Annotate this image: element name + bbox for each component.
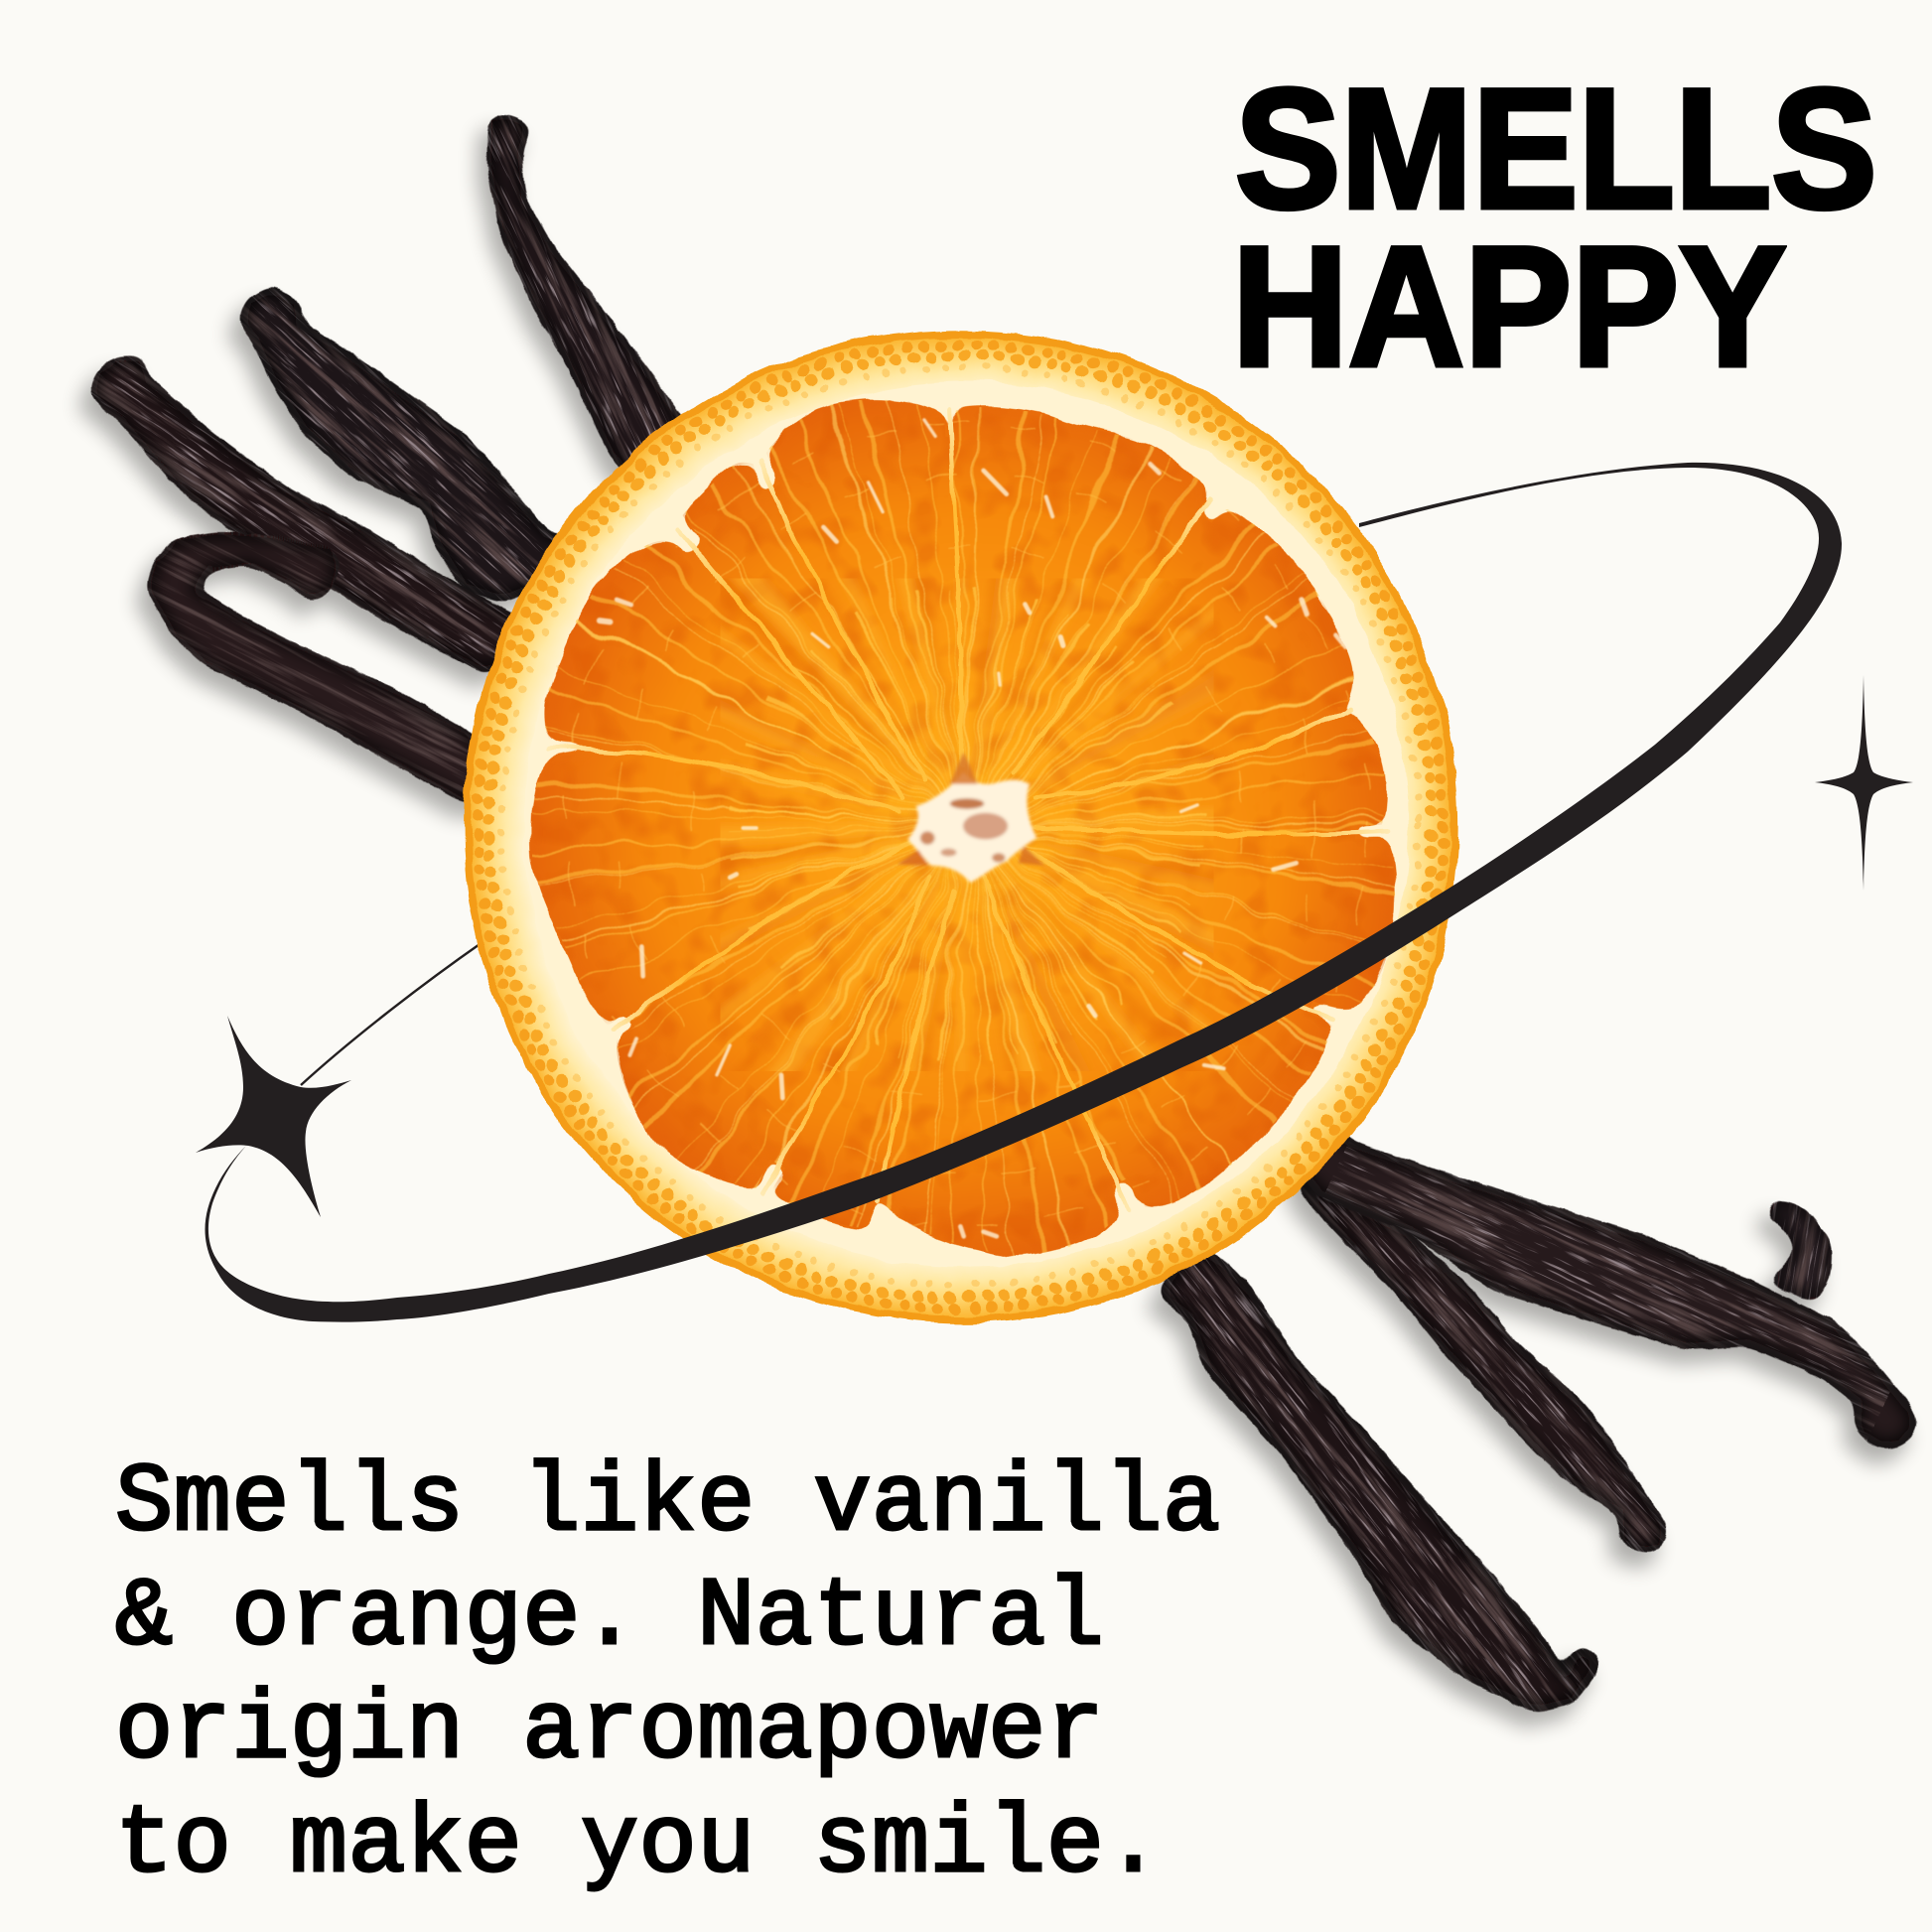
pod: long left xyxy=(90,354,512,673)
pod: top xyxy=(485,114,681,467)
orange slice xyxy=(464,329,1457,1323)
orange centre xyxy=(897,753,1044,883)
pod: fat middle xyxy=(239,286,558,602)
pod: hooked xyxy=(147,531,473,802)
pod shadows xyxy=(78,128,1909,1727)
orange rind and pith xyxy=(464,329,1457,1323)
title: HAPPY xyxy=(1231,211,1786,402)
segment veins xyxy=(512,383,1415,1266)
segment seams xyxy=(549,410,1389,1210)
orange segments xyxy=(531,399,1395,1256)
orbit ring: swoosh in front of the orange xyxy=(205,463,1842,1322)
orbit ring: thin back line, upper left xyxy=(301,942,483,1085)
title: SMELLS xyxy=(1235,54,1877,244)
pod: bottom long xyxy=(1161,1254,1598,1713)
soft light and dark rays xyxy=(743,601,1191,1048)
pod: stub right xyxy=(1769,1200,1833,1301)
icon: small sparkle right xyxy=(1815,675,1913,891)
juice highlights xyxy=(600,420,1345,1236)
title xyxy=(1231,54,1877,402)
body text: Smells like vanilla & orange. Natural origin aromapower to make you smile. xyxy=(115,1449,1221,1900)
icon: large four-point star on the ring xyxy=(196,1016,351,1217)
vanilla pods xyxy=(90,114,1918,1713)
